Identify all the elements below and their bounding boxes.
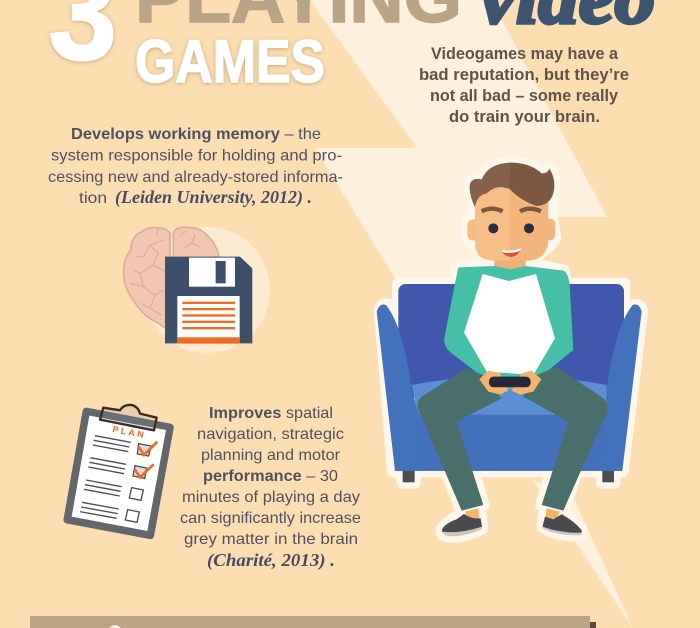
character trousers: [417, 367, 607, 511]
intro text: bad reputation, but they’re: [419, 65, 629, 84]
character head: [467, 163, 555, 270]
sofa: [377, 284, 642, 482]
sofa front: [410, 415, 610, 471]
intro text: Videogames may have a: [431, 44, 619, 63]
clipboard check marks: [135, 442, 157, 477]
text block: spatial navigation: Improves spatial: [209, 405, 333, 422]
icon: brain and floppy disk: [124, 227, 270, 353]
clipboard clip: [100, 405, 157, 430]
sticker outline: [380, 163, 642, 536]
shoes: [442, 508, 582, 536]
text block: spatial navigation: (Charité, 2013) .: [207, 550, 335, 571]
clipboard board: [63, 408, 174, 539]
sofa feet: [403, 471, 614, 482]
text block: working memory: [48, 126, 343, 208]
sofa seat cushion: [412, 376, 607, 417]
text block: working memory: tion: [79, 190, 107, 207]
eyes: [488, 223, 534, 233]
sofa left arm: [377, 305, 419, 471]
text block: spatial navigation: navigation, strategic: [197, 426, 344, 443]
illustration: gamer on sofa: [377, 163, 642, 536]
text block: working memory: cessing new and already-stored informa-: [48, 169, 343, 186]
title: [48, 0, 655, 95]
intro text: do train your brain.: [449, 107, 600, 126]
eyebrows: [482, 209, 541, 211]
text block: spatial navigation: minutes of playing a day: [182, 489, 360, 506]
intro text: [419, 44, 629, 126]
text block: working memory: system responsible for holding and pro-: [51, 148, 342, 164]
icon: brain: [124, 227, 219, 329]
mouth: [501, 248, 522, 257]
icon: clipboard plan: [63, 405, 174, 539]
lightning bolt background: [310, 0, 633, 628]
text block: spatial navigation: [180, 405, 361, 571]
text block: working memory: Develops working memory – the: [71, 126, 321, 143]
clipboard heading: PLAN: [112, 424, 145, 440]
text block: working memory: (Leiden University, 2012) .: [115, 187, 312, 208]
sofa right arm: [600, 305, 642, 471]
character shirt: [444, 266, 573, 390]
clipboard paper: [72, 416, 166, 531]
text block: spatial navigation: grey matter in the brain: [184, 531, 358, 548]
bottom banner: [30, 616, 596, 628]
hair: [470, 163, 510, 207]
sofa back: [398, 284, 624, 397]
title word games: GAMES: [135, 28, 325, 95]
text block: spatial navigation: can significantly increase: [180, 510, 361, 527]
hands and controller: [479, 371, 541, 395]
text block: spatial navigation: planning and motor: [201, 447, 341, 464]
text block: spatial navigation: performance – 30: [203, 468, 338, 485]
icon: floppy disk: [165, 257, 252, 344]
clipboard rows: [80, 436, 151, 522]
intro text: not all bad – some really: [430, 86, 619, 105]
